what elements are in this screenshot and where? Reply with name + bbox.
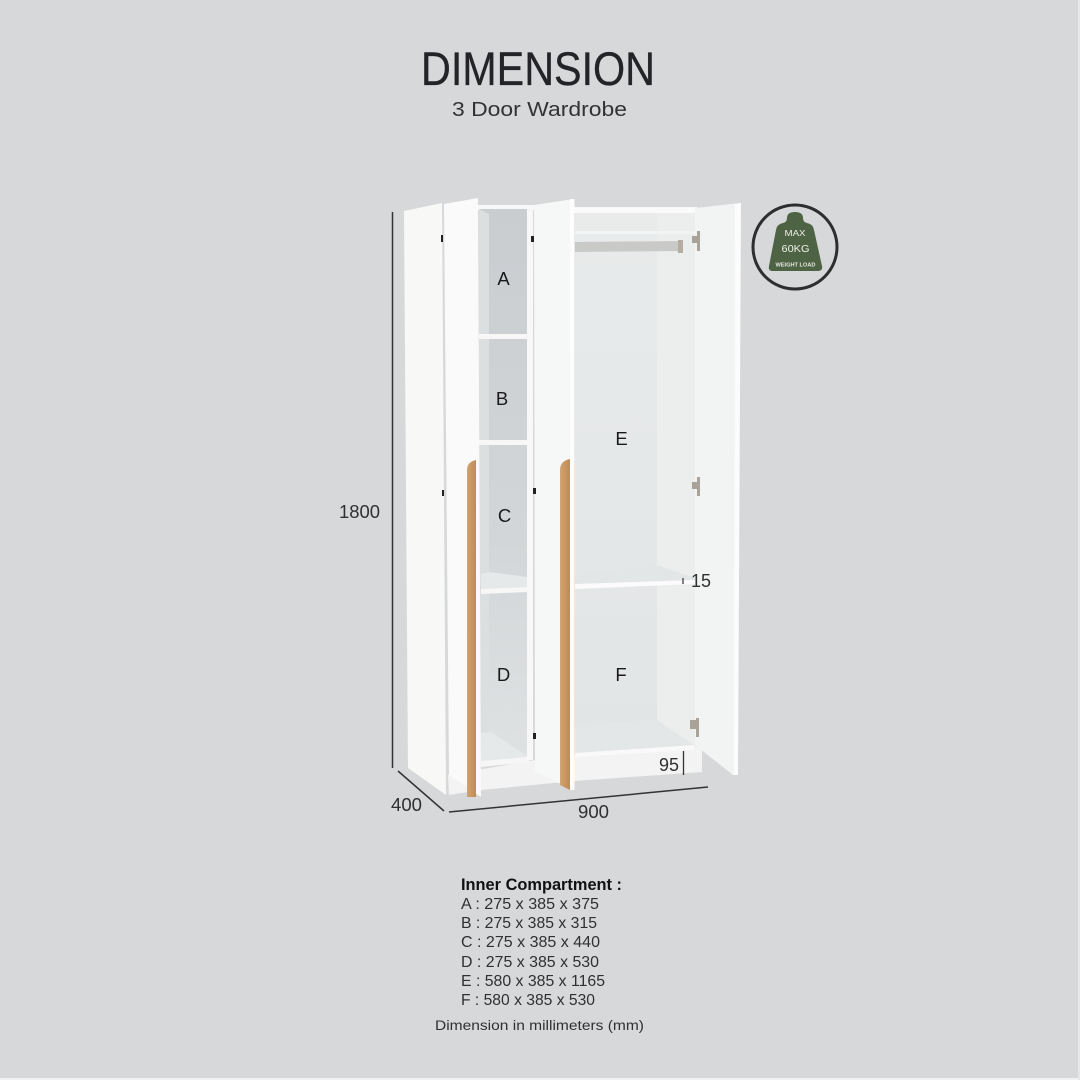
compartment letters: F xyxy=(615,664,627,685)
depth dimension: 400 xyxy=(391,795,422,815)
inner compartment list: Inner Compartment : xyxy=(461,876,622,894)
compartment letters xyxy=(496,268,628,685)
right hanging compartment xyxy=(574,207,697,757)
title: DIMENSION xyxy=(421,42,655,95)
height dimension: 1800 xyxy=(339,502,380,522)
subtitle: 3 Door Wardrobe xyxy=(452,98,627,121)
hanging rail xyxy=(575,241,683,252)
compartment letters: C xyxy=(498,505,511,526)
compartment letters: B xyxy=(496,388,508,409)
weight load badge: MAX xyxy=(784,229,806,238)
inner compartment list: F : 580 x 385 x 530 xyxy=(461,992,595,1009)
inner compartment list: C : 275 x 385 x 440 xyxy=(461,934,600,951)
inner compartment list xyxy=(461,876,622,1009)
compartment letters: D xyxy=(497,664,510,685)
inner compartment list: E : 580 x 385 x 1165 xyxy=(461,973,605,990)
far left door xyxy=(404,203,446,795)
width dimension: 900 xyxy=(578,802,609,822)
depth dimension xyxy=(391,771,444,815)
weight load badge xyxy=(753,205,837,289)
compartment letters: E xyxy=(615,428,628,449)
left compartments column xyxy=(476,205,536,767)
weight load badge: 60KG xyxy=(782,244,810,255)
second door with wooden handle xyxy=(444,198,481,797)
inner compartment list: A : 275 x 385 x 375 xyxy=(461,896,599,913)
shelf xyxy=(575,565,695,584)
plinth height dimension xyxy=(659,751,684,775)
plinth height dimension: 95 xyxy=(659,755,679,775)
shelves xyxy=(479,334,527,339)
compartment letters: A xyxy=(497,268,510,289)
wardrobe illustration xyxy=(404,198,741,797)
shelf thickness dimension: 15 xyxy=(691,571,711,591)
weight icon xyxy=(769,212,822,271)
units note: Dimension in millimeters (mm) xyxy=(435,1018,644,1033)
weight load badge: WEIGHT LOAD xyxy=(776,262,816,268)
inner compartment list: D : 275 x 385 x 530 xyxy=(461,954,599,971)
floor xyxy=(575,720,694,753)
hinges xyxy=(690,231,700,737)
width dimension xyxy=(449,787,708,822)
right door xyxy=(695,203,741,775)
cabinet plinth xyxy=(448,745,702,795)
third door with wooden handle xyxy=(531,199,574,790)
column floor xyxy=(481,732,528,761)
inner compartment list: B : 275 x 385 x 315 xyxy=(461,915,597,932)
